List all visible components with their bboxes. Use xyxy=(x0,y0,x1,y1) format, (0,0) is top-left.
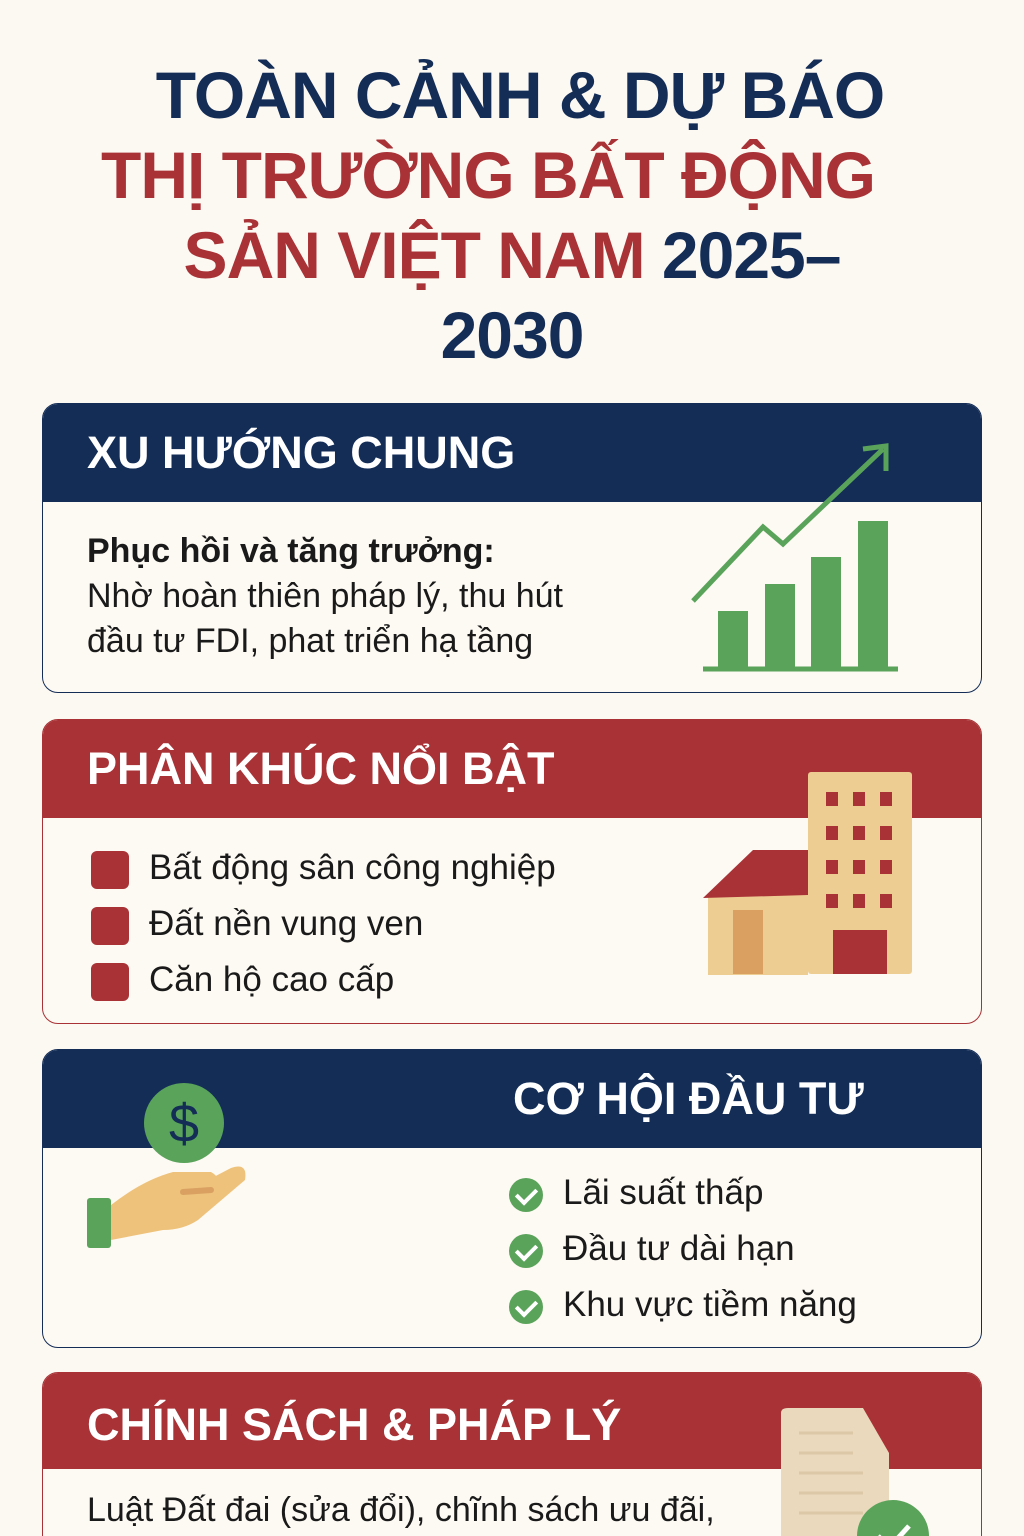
heading: CƠ HỘI ĐẦU TƯ xyxy=(513,1073,864,1124)
heading: XU HƯỚNG CHUNG xyxy=(87,427,515,478)
panel: chinh sach & phap ly xyxy=(42,1372,982,1536)
heading: PHÂN KHÚC NỔI BẬT xyxy=(87,743,554,794)
icon: document xyxy=(781,1408,929,1536)
list: Đất nền vung ven xyxy=(149,904,423,943)
text block xyxy=(87,532,563,660)
text block: Phục hồi và tăng trưởng: xyxy=(87,532,495,570)
icon: hand with dollar: $ xyxy=(169,1094,199,1154)
title xyxy=(101,58,884,372)
panel: co hoi dau tu xyxy=(42,1049,982,1348)
title: 2030 xyxy=(441,298,583,372)
text block: đầu tư FDI, phat triển hạ tầng xyxy=(87,622,533,660)
heading xyxy=(43,720,981,818)
list: Khu vực tiềm năng xyxy=(563,1285,857,1324)
heading: CHÍNH SÁCH & PHÁP LÝ xyxy=(87,1399,621,1450)
list: Căn hộ cao cấp xyxy=(149,960,394,999)
text block: Luật Đất đai (sửa đổi), chĩnh sách ưu đãi, xyxy=(87,1491,715,1529)
list xyxy=(509,1173,857,1324)
icon: buildings xyxy=(703,772,912,975)
heading xyxy=(43,1050,981,1148)
title: THỊ TRƯỜNG BẤT ĐỘNG xyxy=(101,138,875,212)
heading xyxy=(43,404,981,502)
list: Bất động sân công nghiệp xyxy=(149,848,556,887)
heading xyxy=(43,1373,981,1469)
list xyxy=(91,848,556,1001)
text block: Nhờ hoàn thiên pháp lý, thu hút xyxy=(87,577,563,615)
list: Đầu tư dài hạn xyxy=(563,1229,795,1268)
list: Lãi suất thấp xyxy=(563,1173,763,1212)
panel: xu huong chung xyxy=(42,403,982,693)
icon: growth chart xyxy=(691,443,898,672)
title: SẢN VIỆT NAM 2025– xyxy=(184,218,840,292)
title: TOÀN CẢNH & DỰ BÁO xyxy=(156,58,884,132)
icon: hand with dollar xyxy=(87,1083,246,1248)
panel: phan khuc noi bat xyxy=(42,719,982,1024)
